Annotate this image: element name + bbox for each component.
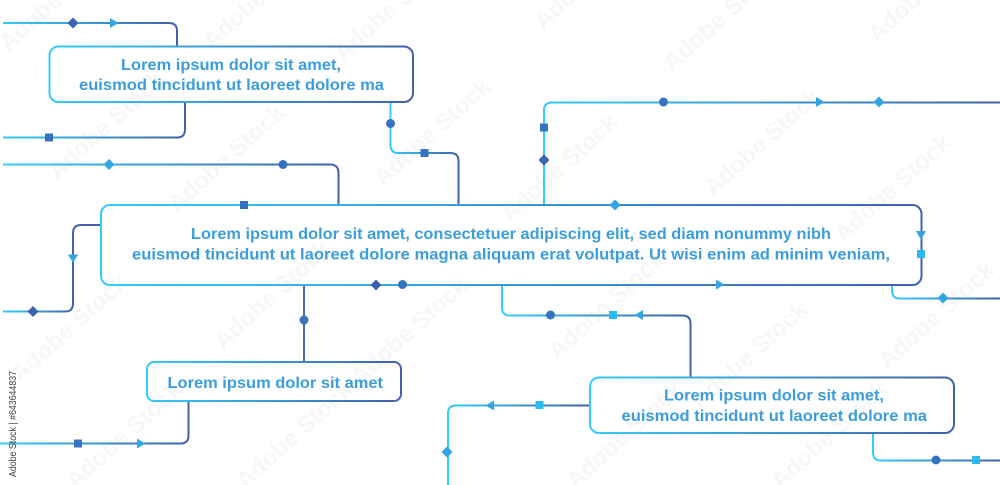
icon: diamond on main box top [610, 200, 620, 210]
icon: circle [932, 456, 940, 464]
text: lower right box label [622, 388, 927, 425]
icon: diamond [874, 96, 884, 108]
icon: diamond [104, 159, 114, 170]
text: main box label: Lorem ipsum dolor sit amet, consectetuer adipiscing elit, sed diam nonummy nibh [191, 226, 831, 243]
text: main box label: euismod tincidunt ut laoreet dolore magna aliquam erat volutpat. Ut wisi enim ad minim veniam, [132, 246, 890, 264]
icon: diamond [68, 18, 78, 28]
text: lower right box label: euismod tincidunt ut laoreet dolore ma [622, 408, 927, 425]
watermark pattern: Adobe Stock [369, 73, 497, 191]
icon: circle [659, 98, 668, 106]
watermark pattern: Adobe Stock [873, 256, 1000, 374]
panel: lower right box [590, 378, 954, 433]
panel: lower left box [147, 362, 401, 401]
connector: box 1 to main box [386, 102, 458, 205]
icon: square [45, 134, 53, 142]
icon: triangle on main box right [916, 231, 926, 240]
connector: main box top to right edge [538, 96, 1000, 205]
text: lower left box label: Lorem ipsum dolor sit amet [168, 375, 384, 392]
icon: square [536, 401, 544, 409]
icon: square on main box top [240, 201, 248, 209]
icon: triangle arrow [486, 400, 494, 410]
watermark pattern: Adobe Stock [543, 246, 671, 364]
connector: main box to box 4 [502, 285, 690, 378]
watermark pattern: Adobe Stock [699, 83, 827, 201]
watermark pattern: Adobe Stock [209, 236, 337, 354]
icon: diamond [442, 446, 452, 458]
icon: triangle arrow [68, 254, 78, 263]
icon: circle [546, 310, 555, 320]
icon: square [420, 149, 428, 157]
icon: circle [300, 316, 308, 324]
icon: triangle on main box bottom [716, 280, 724, 290]
panel: main box [101, 200, 926, 290]
icon: diamond [938, 292, 948, 304]
icon: triangle arrow [816, 97, 824, 107]
watermark pattern: Adobe Stock [829, 129, 957, 247]
text: top left box label: Lorem ipsum dolor sit amet, [121, 57, 341, 74]
connector: box 3 to left edge [0, 401, 188, 448]
connector: box 4 bottom to right edge [873, 433, 1000, 464]
text: lower right box label: Lorem ipsum dolor sit amet, [664, 388, 884, 404]
connector: box 4 to bottom edge [442, 400, 590, 485]
connector: box 1 bottom to left edge [3, 102, 185, 142]
icon: diamond [28, 306, 38, 317]
watermark pattern: Adobe Stock [496, 109, 624, 227]
watermark pattern: Adobe Stock [686, 296, 814, 414]
icon: square [609, 311, 617, 319]
icon: circle [278, 160, 288, 169]
icon: triangle arrow [634, 310, 643, 320]
text: top left box label: euismod tincidunt ut laoreet dolore ma [79, 77, 384, 94]
icon: diamond on main box bottom [370, 280, 382, 290]
watermark pattern: Adobe Stock [6, 269, 134, 387]
icon: square [74, 440, 82, 448]
icon: diamond [538, 154, 550, 166]
connector: left edge into main box top [3, 159, 338, 205]
watermark pattern: Adobe Stock [346, 272, 474, 390]
connector: main box to right edge [892, 285, 1000, 304]
icon: triangle arrow [110, 18, 118, 28]
icon: square [972, 456, 980, 464]
text: main box label [132, 226, 890, 264]
watermark pattern: Adobe Stock [43, 66, 171, 184]
icon: triangle arrow [137, 438, 146, 448]
connector: top left line into box 1 [3, 18, 177, 46]
text: stock credit: Adobe Stock | #643644837 [7, 371, 19, 477]
icon: square [540, 124, 548, 132]
connector: main box left to left edge [3, 225, 101, 317]
icon: circle on main box bottom [398, 280, 407, 289]
icon: circle [386, 119, 395, 128]
watermark pattern: Adobe Stock [163, 99, 291, 217]
text: top left box label [79, 57, 384, 94]
connector: main box to box 3 [300, 285, 308, 362]
icon: square on main box right [917, 250, 925, 258]
panel: top left box [50, 46, 413, 102]
